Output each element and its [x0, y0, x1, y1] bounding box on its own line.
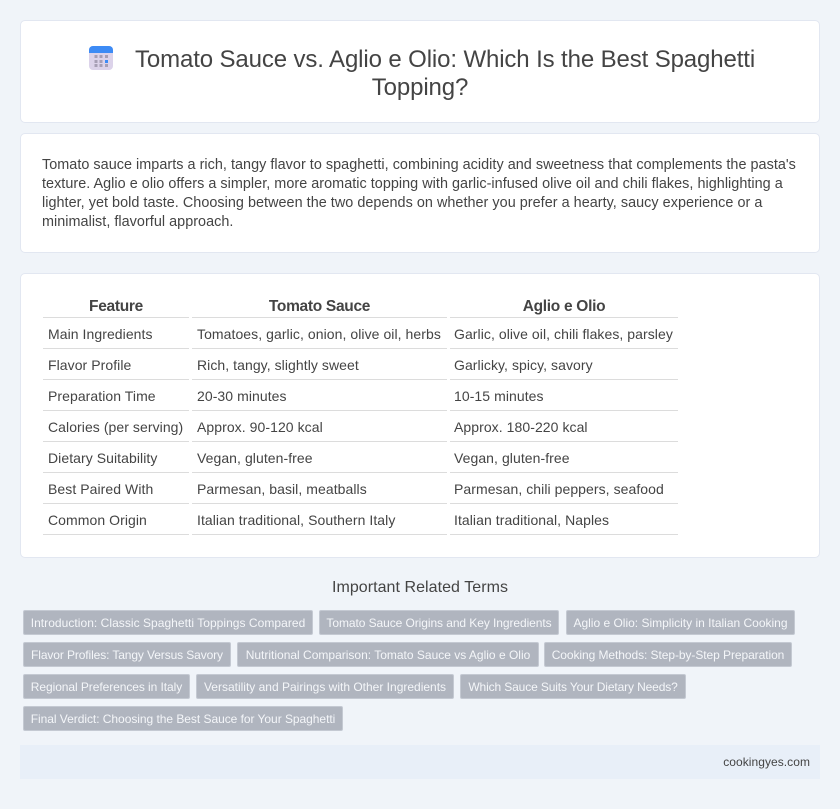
text block: introduction: lighter, yet bold taste. Choosing between the two depends on whether you prefer a hearty, saucy experience or a	[42, 195, 762, 211]
related terms tags: Which Sauce Suits Your Dietary Needs?	[468, 680, 678, 694]
related terms tags: Tomato Sauce Origins and Key Ingredients	[326, 616, 552, 630]
comparison table: Parmesan, basil, meatballs	[197, 481, 367, 497]
heading: important related terms: Important Related Terms	[332, 579, 508, 596]
comparison table	[43, 298, 678, 535]
comparison table: Tomatoes, garlic, onion, olive oil, herbs	[197, 326, 441, 342]
panel: introduction	[20, 133, 820, 253]
text block: introduction: minimalist, flavorful approach.	[42, 214, 233, 230]
comparison table: Italian traditional, Southern Italy	[197, 512, 395, 528]
related terms tags: Aglio e Olio: Simplicity in Italian Cooking	[573, 616, 788, 630]
comparison table: Aglio e Olio	[523, 298, 605, 315]
related terms tags: Nutritional Comparison: Tomato Sauce vs Aglio e Olio	[246, 648, 530, 662]
comparison table: Best Paired With	[48, 481, 153, 497]
title: Tomato Sauce vs. Aglio e Olio: Which Is the Best Spaghetti	[135, 46, 755, 73]
comparison table: Main Ingredients	[48, 326, 153, 342]
comparison table: Garlic, olive oil, chili flakes, parsley	[454, 326, 673, 342]
comparison table: Dietary Suitability	[48, 450, 157, 466]
comparison table: Vegan, gluten-free	[454, 450, 570, 466]
comparison table: Garlicky, spicy, savory	[454, 357, 593, 373]
icon: calendar	[89, 46, 113, 70]
related terms tags: Final Verdict: Choosing the Best Sauce for Your Spaghetti	[31, 712, 335, 726]
comparison table: Italian traditional, Naples	[454, 512, 609, 528]
comparison table: 10-15 minutes	[454, 388, 544, 404]
related terms tags: Cooking Methods: Step-by-Step Preparation	[552, 648, 784, 662]
related terms tags: Regional Preferences in Italy	[31, 680, 182, 694]
title	[135, 46, 755, 101]
comparison table: Vegan, gluten-free	[197, 450, 313, 466]
footer	[20, 745, 820, 779]
comparison table: 20-30 minutes	[197, 388, 287, 404]
comparison table: Flavor Profile	[48, 357, 131, 373]
panel: comparison table	[20, 273, 820, 558]
comparison table: Calories (per serving)	[48, 419, 183, 435]
comparison table: Approx. 90-120 kcal	[197, 419, 323, 435]
panel: header	[20, 20, 820, 123]
comparison table: Parmesan, chili peppers, seafood	[454, 481, 664, 497]
text block: introduction: Tomato sauce imparts a rich, tangy flavor to spaghetti, combining acidity and sweetness that complements the pasta's	[42, 157, 796, 173]
title: Topping?	[372, 74, 468, 101]
related terms tags: Flavor Profiles: Tangy Versus Savory	[31, 648, 223, 662]
text block: introduction	[42, 157, 796, 230]
footer source text: cookingyes.com	[723, 755, 810, 769]
comparison table: Feature	[89, 298, 143, 315]
comparison table: Preparation Time	[48, 388, 156, 404]
comparison table: Common Origin	[48, 512, 147, 528]
related terms tags	[23, 610, 795, 731]
related terms tags: Versatility and Pairings with Other Ingredients	[204, 680, 446, 694]
comparison table: Tomato Sauce	[269, 298, 370, 315]
text block: introduction: texture. Aglio e olio offers a simpler, more aromatic topping with garlic-infused olive oil and chili flakes, highlighting a	[42, 176, 783, 192]
comparison table: Approx. 180-220 kcal	[454, 419, 588, 435]
related terms tags: Introduction: Classic Spaghetti Toppings Compared	[31, 616, 305, 630]
comparison table: Rich, tangy, slightly sweet	[197, 357, 359, 373]
